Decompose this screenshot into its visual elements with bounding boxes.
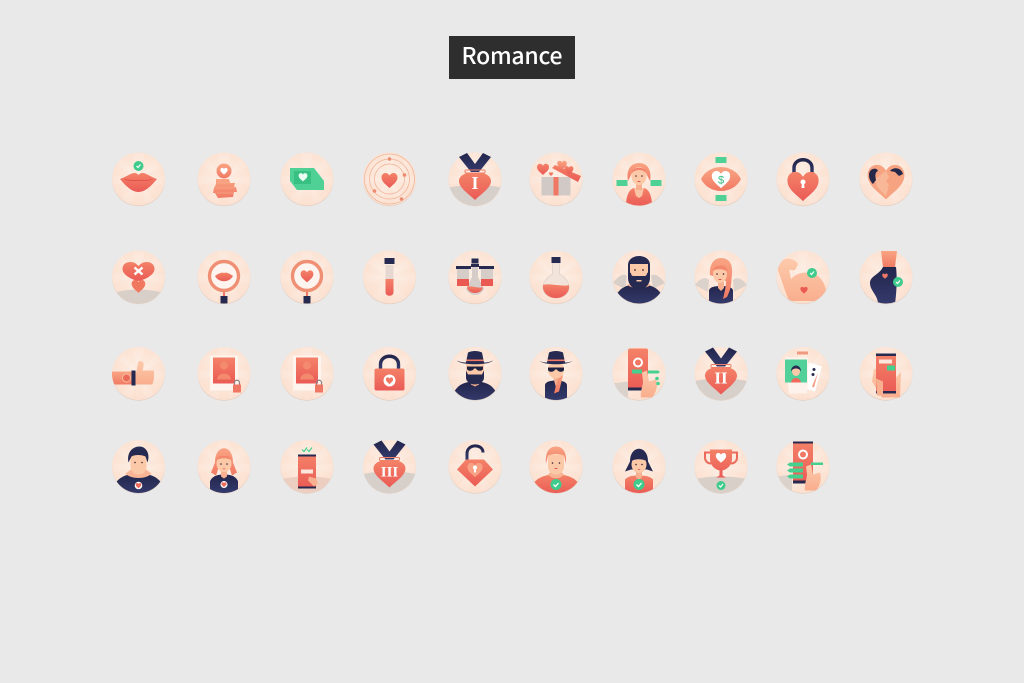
icon: coins with heart <box>198 152 250 206</box>
icon: test tube <box>363 250 416 304</box>
icon: body with check <box>860 250 912 304</box>
icon: woman with ponytail <box>694 250 748 304</box>
icon: eye with dollar heart <box>694 152 748 206</box>
icon: broken heart with X <box>112 250 166 305</box>
icon: locked photo 2 <box>280 347 334 401</box>
icon: padlock with heart <box>363 347 416 401</box>
icon: gift box with hearts <box>530 152 582 206</box>
icon: photo cards <box>776 347 830 401</box>
icon: heart padlock <box>776 152 830 206</box>
icon: orbit heart <box>363 152 416 206</box>
icon: girl with pigtails <box>198 440 250 494</box>
icon: magnifier heart <box>280 250 334 304</box>
icon: trophy with check <box>694 440 748 494</box>
icon: medal III <box>362 440 416 494</box>
icon: man with hat <box>448 347 502 402</box>
icon: phone with finger and arrows <box>612 347 666 401</box>
icon: superhero man <box>112 440 165 494</box>
icon: woman with check <box>612 440 666 494</box>
icon: eye with dollar heart: $ <box>718 174 724 186</box>
icon: muscle arm <box>776 250 830 304</box>
icon: lips with check <box>112 152 165 206</box>
title <box>449 36 575 79</box>
icon: phone with arrows <box>776 440 830 494</box>
icon: open padlock <box>448 440 502 494</box>
icon: money with heart <box>280 152 334 206</box>
icon: thumbs up with watch <box>112 347 165 401</box>
icon: kissing couple heart <box>860 152 912 206</box>
icon: round flask <box>530 250 582 304</box>
icon: flasks <box>448 250 502 304</box>
title: Romance <box>462 37 562 71</box>
icon: bearded man <box>612 250 666 305</box>
icon: phone with check marks <box>280 440 334 494</box>
icon: medal II <box>694 347 748 402</box>
icon: magnifier lips <box>198 250 250 304</box>
icon: woman with bills <box>612 152 666 206</box>
icon: medal I: I <box>471 173 479 193</box>
icon: medal III: III <box>381 464 398 480</box>
icon: phone in hand <box>860 347 912 401</box>
icon: medal I <box>448 152 502 207</box>
icon: medal II: II <box>714 368 728 388</box>
icon: locked photo <box>198 347 250 401</box>
icon: man with check <box>530 440 582 494</box>
icon: woman with hat <box>530 347 582 401</box>
